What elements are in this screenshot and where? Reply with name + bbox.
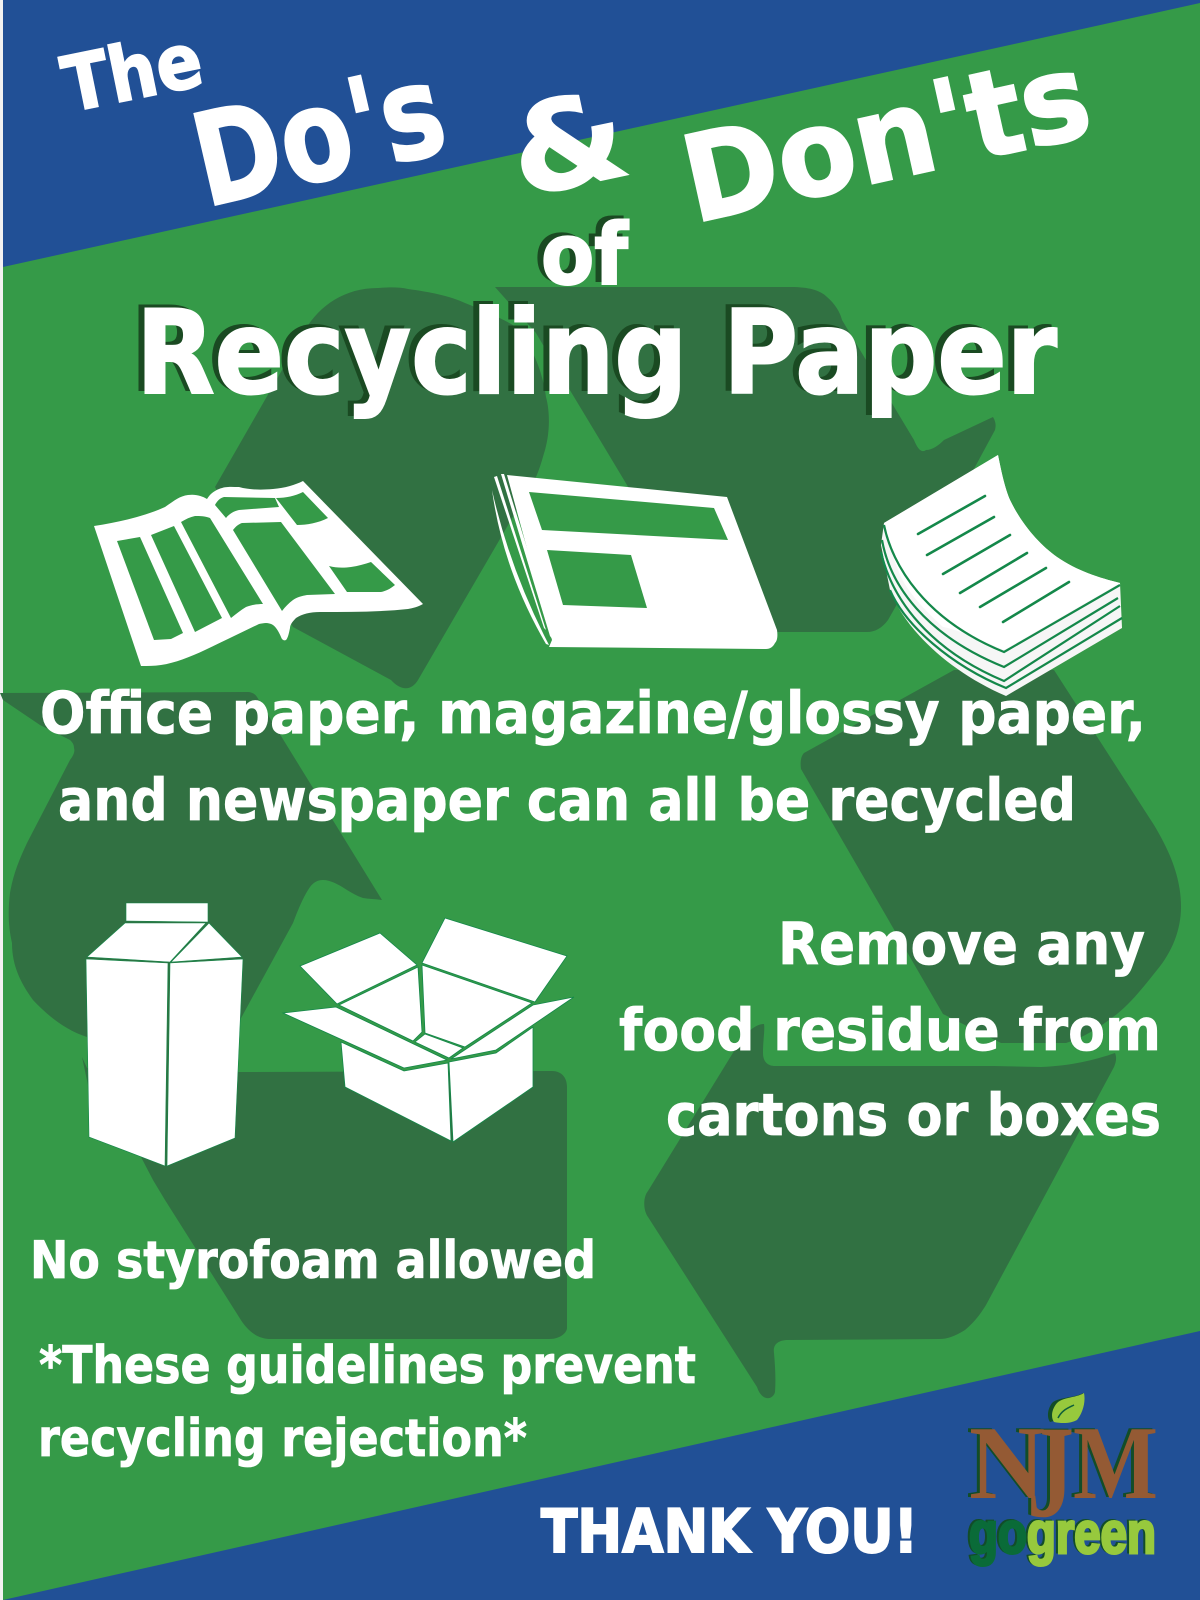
icon: milk carton [86, 903, 243, 1166]
text: thank you: THANK YOU! [541, 1497, 918, 1567]
arrow segment: lower right [644, 1024, 1116, 1398]
arrow segment: left [0, 692, 382, 1090]
recycling symbol background [0, 287, 1181, 1398]
title word: Do's: Do's [179, 35, 459, 237]
text: guidelines note: *These guidelines prevent [39, 1336, 696, 1396]
logo wordmark NJM: J [1027, 1398, 1074, 1545]
logo wordmark NJM: N [969, 1404, 1045, 1521]
icon: open cardboard box [283, 918, 574, 1142]
arrow segment: right [801, 670, 1181, 1043]
title line: Recycling Paper: Recycling Paper [136, 286, 1057, 421]
arrow segment: upper right [495, 287, 996, 632]
icon: folded newspaper [492, 474, 777, 649]
text: remove food residue: cartons or boxes [666, 1081, 1161, 1149]
text: remove food residue: Remove any [778, 910, 1145, 978]
logo wordmark NJM: M [1073, 1404, 1158, 1521]
arrow segment: upper left [215, 287, 549, 688]
text: remove food residue: food residue from [619, 996, 1161, 1064]
logo wordmark NJM [969, 1398, 1158, 1545]
text: guidelines note [38, 1336, 696, 1469]
title word: ampersand: & [498, 63, 639, 225]
text: guidelines note: recycling rejection* [38, 1409, 527, 1469]
title word: of: of [541, 206, 629, 305]
title word: The: The [55, 15, 210, 130]
title word: Don'ts: Don'ts [670, 26, 1103, 251]
text: no styrofoam: No styrofoam allowed [30, 1231, 596, 1291]
text: what can be recycled: and newspaper can all be recycled [58, 766, 1076, 834]
logo wordmark gogreen: gogreen [969, 1501, 1156, 1566]
text: remove food residue [619, 910, 1161, 1149]
arrow segment: lower left [82, 1057, 567, 1339]
icon: open magazine [94, 481, 423, 666]
icon: stack of office paper [881, 455, 1122, 696]
top blue diagonal band [3, 0, 1200, 267]
title block [55, 15, 1103, 421]
logo leaf [1048, 1393, 1085, 1423]
logo: NJM go green [969, 1393, 1158, 1566]
text: what can be recycled [40, 679, 1146, 834]
bottom blue diagonal band [3, 1331, 1200, 1600]
